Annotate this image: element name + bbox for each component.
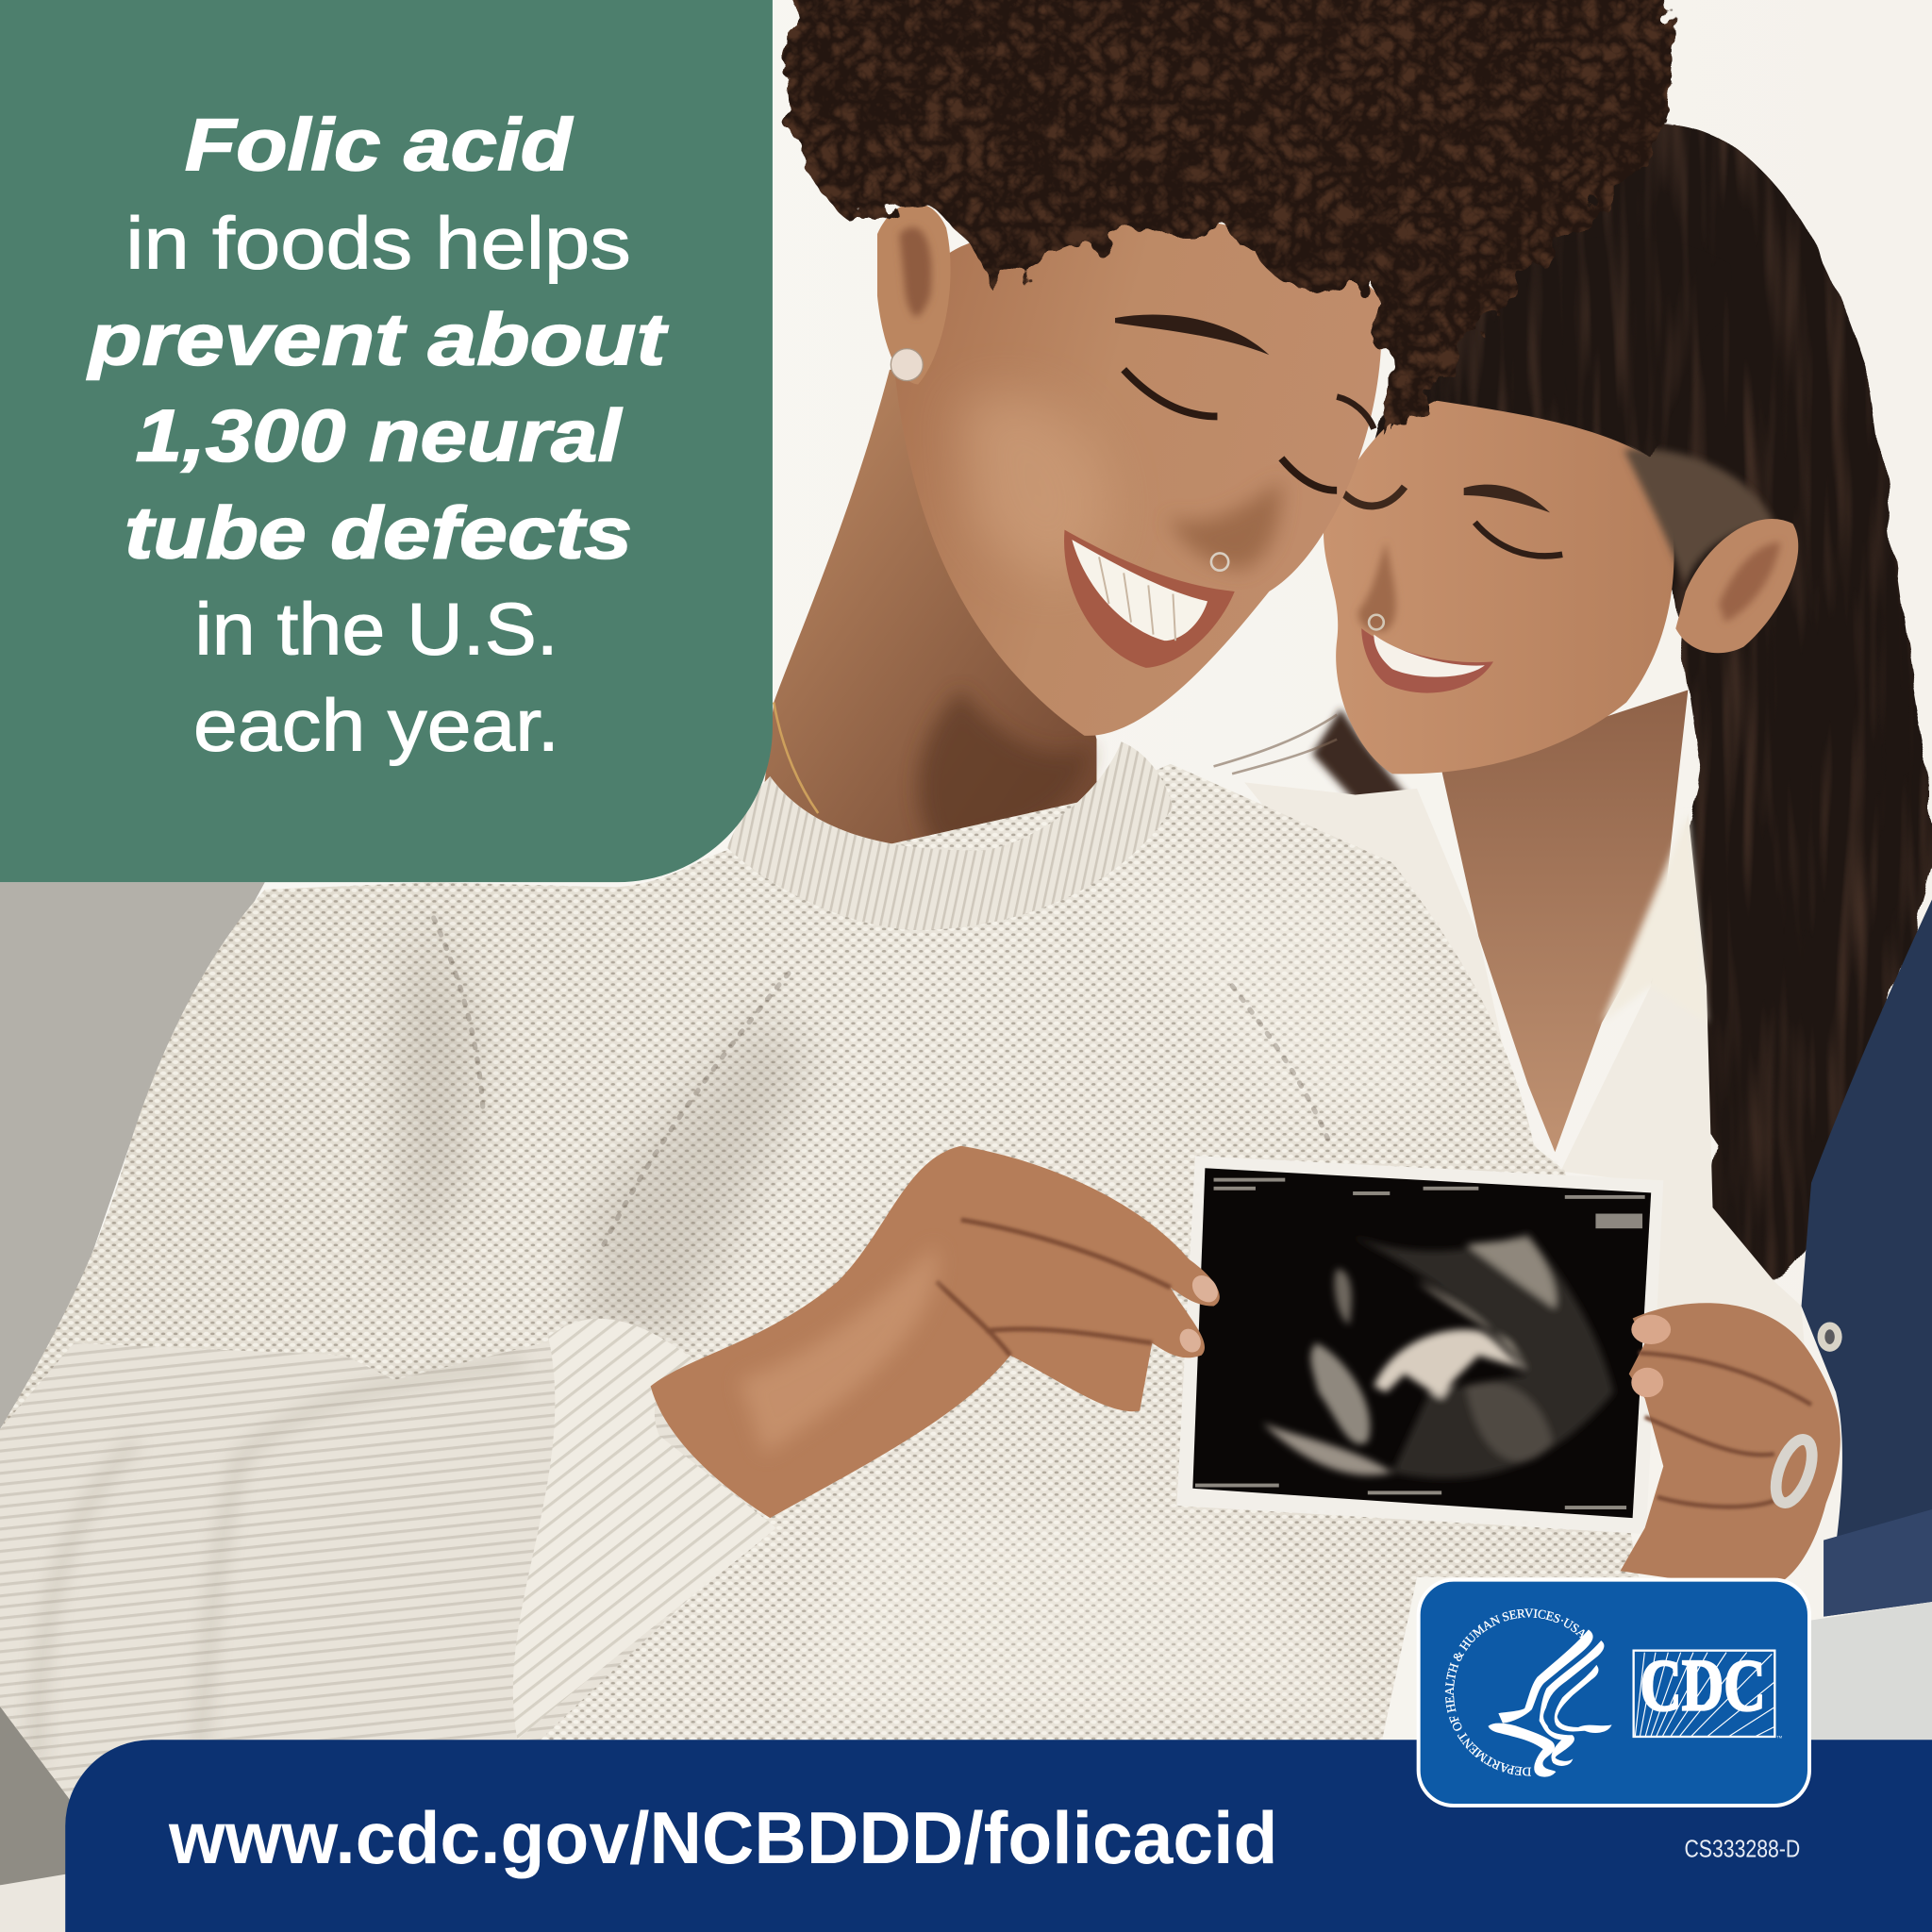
statement text: prevent about [87, 298, 669, 381]
second person: neck and chest [1441, 690, 1688, 1152]
raglan seam holes [434, 918, 1331, 1244]
ultrasound image [1195, 1178, 1645, 1509]
panel: folic acid message [0, 0, 773, 882]
statement text: tube defects [125, 491, 632, 575]
second person: hair behind [1374, 123, 1932, 1276]
closed eye [1124, 370, 1217, 416]
eyebrow [1115, 314, 1269, 355]
cheek highlight [961, 394, 1109, 578]
finger shadows [937, 1220, 1171, 1356]
shirt collar shading [1602, 813, 1707, 1023]
statement text: in foods helps [125, 202, 631, 285]
ring [1769, 1435, 1820, 1507]
sweater fold shadows [381, 883, 1440, 1728]
sweater body [0, 740, 1663, 1848]
shirt [1244, 782, 1805, 1356]
sleeve folds [37, 1361, 524, 1774]
eyebrow [1464, 485, 1550, 512]
collar ribbing [727, 741, 1173, 930]
shaved side of head [1624, 449, 1774, 585]
document code: CS333288-D [1684, 1834, 1800, 1862]
nose shadow [1358, 542, 1396, 631]
trademark mark: TM [1776, 1735, 1782, 1740]
eagle emblem [1489, 1630, 1610, 1776]
first person: curly hair [786, 0, 1676, 443]
CDC logo [1632, 1649, 1782, 1738]
collar [727, 741, 1173, 930]
sofa [0, 882, 265, 1932]
statement text: Folic acid [185, 103, 574, 186]
fingernails [1631, 1315, 1671, 1344]
website url: www.cdc.gov/NCBDDD/folicacid [168, 1796, 1277, 1879]
jacket knit hem and button [1818, 1322, 1932, 1617]
teeth lines [1099, 557, 1175, 641]
trousers [1811, 1602, 1932, 1743]
nose ring [1211, 553, 1228, 571]
second person: fringe [1392, 240, 1731, 458]
septum ring [1369, 615, 1384, 629]
earring [891, 349, 923, 381]
statement text [87, 103, 669, 766]
ultrasound print [1176, 1156, 1663, 1534]
finger separation [1639, 1353, 1811, 1507]
ear [1675, 519, 1798, 653]
first person: hand holding print [651, 1146, 1223, 1518]
neck shadow [918, 690, 1091, 850]
HHS seal: DEPARTMENT OF HEALTH & HUMAN SERVICES·USA [1445, 1608, 1585, 1776]
sleeve cuff [513, 1319, 776, 1740]
second person: face [1324, 400, 1798, 774]
smile [1361, 628, 1493, 693]
closed eye [1474, 523, 1562, 556]
printed scan labels [1195, 1178, 1645, 1509]
first person: face [877, 203, 1382, 736]
hair wisps behind shoulder [1214, 708, 1411, 836]
smile [1064, 530, 1235, 668]
statement text: each year. [193, 683, 559, 766]
wrist highlight [740, 1244, 938, 1454]
footer bar [65, 1740, 1932, 1932]
jacket [1802, 862, 1932, 1617]
second person: hand and ring [1621, 1303, 1840, 1591]
nose [1168, 480, 1281, 569]
fingernails [1187, 1271, 1223, 1307]
statement text: in the U.S. [194, 588, 558, 671]
statement text: 1,300 neural [136, 393, 624, 476]
far eye and brow [1281, 458, 1337, 491]
ear [877, 203, 951, 385]
logo badge: HHS and CDC [1417, 1577, 1811, 1807]
seal circular text [1454, 1617, 1597, 1768]
necklace [774, 702, 818, 813]
first person: neck [764, 370, 1096, 850]
CDC lettering: CDC [1640, 1644, 1766, 1726]
far eye [1343, 487, 1405, 506]
sleeve ribbing [0, 1343, 764, 1805]
